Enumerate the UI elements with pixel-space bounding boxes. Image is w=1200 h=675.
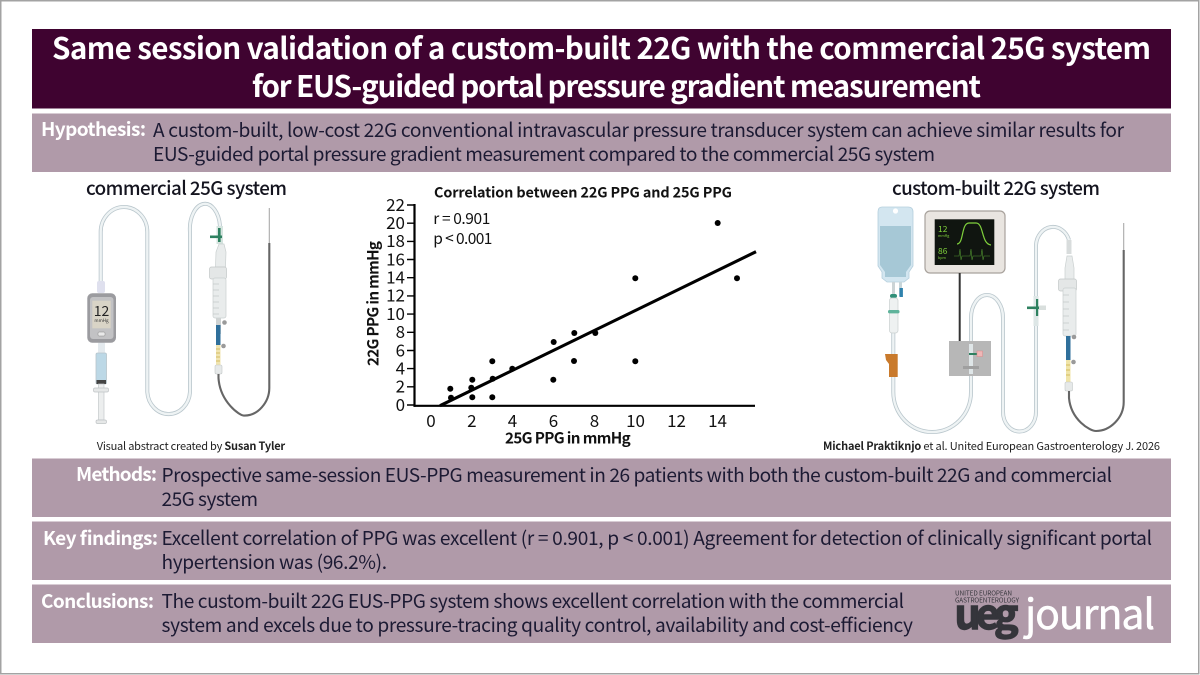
x axis: 0 [426,407,436,432]
panel: conclusions: Conclusions: [41,587,154,614]
y axis: 20 [386,209,405,234]
title banner: for EUS-guided portal pressure gradient measurement [252,63,981,106]
icon: needle [1069,223,1124,431]
x axis: 10 [626,407,645,432]
data points [447,220,740,401]
scatter chart: correlation between 22G PPG and 25G PPG [362,182,756,448]
y axis: 10 [386,300,405,325]
icon: endoscopic needle handle [210,226,227,374]
logo: UEG journal: ueg [954,581,1018,641]
icon: monitor: bpm [938,256,946,261]
panel: hypothesis: Hypothesis: [41,115,146,142]
y axis: 0 [396,391,405,416]
tubing [101,204,220,414]
logo: UEG journal: UNITED EUROPEAN [955,588,1012,598]
y axis: 6 [396,336,405,361]
icon: monitor: mmHg [938,234,949,239]
x axis: 14 [708,407,727,432]
title banner: Same session validation of a custom-built 22G with the commercial 25G system [52,25,1151,68]
chart title: Correlation between 22G PPG and 25G PPG [434,182,732,202]
illustration: commercial 25G system [87,204,269,424]
x axis: 8 [590,407,599,432]
icon: monitor: 12 [938,223,948,235]
x axis: 4 [508,407,517,432]
y axis: 22 [386,191,405,216]
panel: hypothesis [32,114,1171,172]
y axis: 8 [396,318,405,343]
statistics [433,207,492,249]
y axis: 22G PPG in mmHg [362,241,384,366]
x axis: 12 [667,407,686,432]
logo: UEG journal [954,581,1155,641]
icon: transducer mount [949,341,991,376]
tubing [893,227,1069,432]
regression line [440,252,756,406]
icon: monitor: 86 [938,245,948,257]
y axis: 16 [386,245,405,270]
panel: key findings: Key findings: [43,524,158,551]
y axis: 18 [386,227,405,252]
icon: needle [218,208,269,416]
logo: UEG journal: journal [1023,581,1155,641]
icon: saline bag [878,207,913,298]
statistics: r = 0.901 [433,207,490,229]
x axis: 6 [549,407,558,432]
panel: key findings: Excellent correlation of PPG was excellent (r = 0.901, p < 0.001) Agreement for detection of clinically significant portal [162,523,1152,551]
panel: hypothesis: A custom-built, low-cost 22G conventional intravascular pressure transducer system can achieve similar results for [153,115,1125,143]
icon: syringe [94,353,108,424]
icon: pressure meter: mmHg [94,318,109,324]
panel: methods: 25G system [162,484,258,512]
logo: UEG journal: GASTROENTEROLOGY [955,596,1020,604]
icon: drip chamber [888,298,900,333]
panel: hypothesis: EUS-guided portal pressure gradient measurement compared to the commercial 25G system [153,139,935,167]
y axis: 12 [386,282,405,307]
illustration: custom-built 22G system [878,207,1124,432]
icon: pressure meter [87,281,116,354]
icon: pressure meter: 12 [94,301,109,321]
y axis: 2 [396,373,405,398]
icon: monitor [925,211,1005,273]
heading: custom-built 22G system: custom-built 22G system [892,174,1100,201]
panel: methods [32,458,1171,517]
icon: stopcock [1027,296,1046,326]
credit: citation: Michael Praktiknjo et al. United European Gastroenterology J. 2026 [823,438,1160,454]
x axis: 25G PPG in mmHg [505,426,631,448]
panel: conclusions: The custom-built 22G EUS-PPG system shows excellent correlation with the commercial [162,586,904,614]
statistics: p < 0.001 [433,227,492,249]
icon: endoscopic needle handle [1058,240,1076,391]
panel: key findings: hypertension was (96.2%). [162,547,387,575]
title banner [32,25,1171,108]
x axis: 2 [467,407,477,432]
y axis [362,191,414,416]
y axis: 4 [396,354,405,379]
cable [959,273,961,342]
heading: commercial 25G system: commercial 25G system [86,174,287,201]
icon: roller clamp [885,354,898,377]
panel: conclusions: system and excels due to pressure-tracing quality control, availability and cost-efficiency [162,610,913,638]
x axis [414,406,755,448]
credit: visual abstract: Visual abstract created by Susan Tyler [97,438,285,454]
panel: methods: Methods: [76,460,157,487]
panel: methods: Prospective same-session EUS-PPG measurement in 26 patients with both the custom-built 22G and commercial [162,460,1112,488]
y axis: 14 [386,264,405,288]
panel: key findings [32,522,1171,580]
panel: conclusions [32,581,1171,643]
